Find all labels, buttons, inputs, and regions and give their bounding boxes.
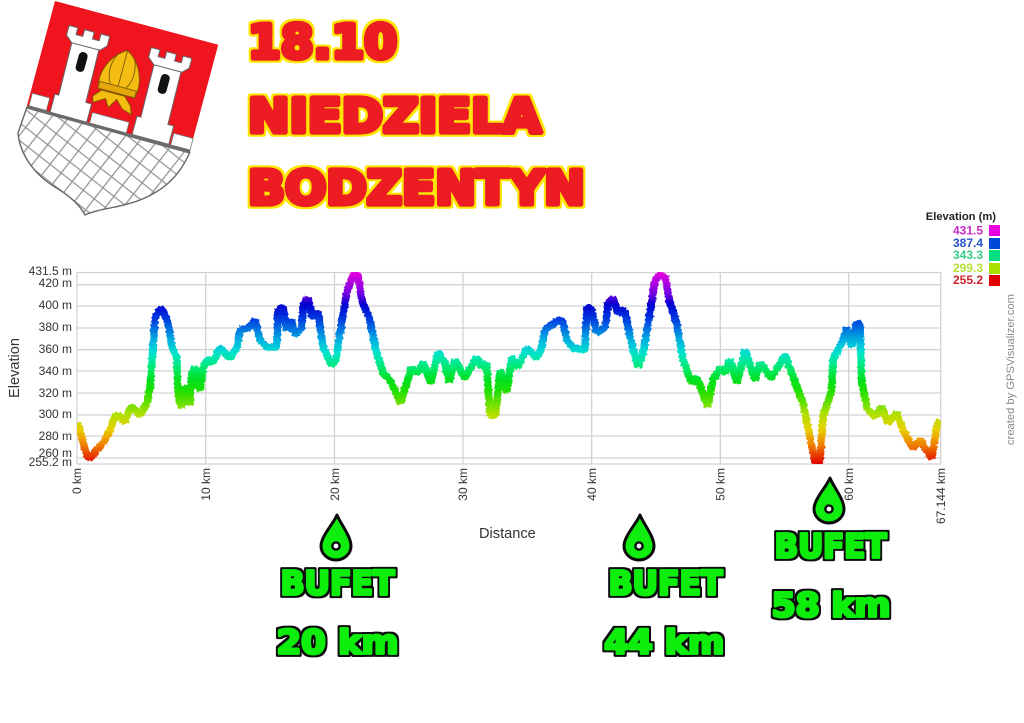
left tower (46, 25, 110, 122)
title line: town: BODZENTYN (248, 162, 585, 216)
x axis labels: 50 km (714, 468, 728, 501)
chart grid (77, 272, 941, 464)
label: 20 km: 20 km (277, 623, 398, 661)
credit text: created by GPSVisualizer.com (1005, 294, 1017, 445)
x axis labels: 67.144 km (934, 468, 948, 524)
x axis labels: 0 km (70, 468, 84, 494)
y axis labels: 360 m (39, 342, 72, 356)
coat of arms shield (18, 1, 218, 215)
legend row 255.2: 255.2 (953, 273, 983, 287)
icon: drop at 44 km (624, 515, 654, 560)
wall blocks (28, 93, 194, 151)
y axis title: Elevation (7, 338, 23, 398)
y axis labels: 431.5 m (29, 264, 72, 278)
elevation profile line (77, 275, 940, 462)
buffet marker 44 km (604, 515, 724, 661)
title (248, 16, 585, 216)
legend row 431.5: 431.5 (953, 224, 983, 238)
legend row 387.4: 387.4 (953, 236, 983, 250)
x axis labels: 60 km (842, 468, 856, 501)
legend title: Elevation (m) (926, 211, 996, 223)
title line: weekday: NIEDZIELA (248, 90, 541, 144)
y axis labels: 300 m (39, 407, 72, 421)
shield net lower part (18, 107, 190, 215)
label: BUFET: BUFET (775, 527, 887, 565)
y axis labels: 320 m (39, 386, 72, 400)
icon: drop at 20 km (321, 515, 351, 560)
legend row 299.3: 299.3 (953, 261, 983, 275)
label: 58 km: 58 km (772, 586, 890, 624)
x axis labels: 20 km (328, 468, 342, 501)
y axis labels (29, 264, 72, 469)
buffet marker 58 km (772, 478, 890, 624)
label: 44 km: 44 km (604, 623, 724, 661)
x axis title: Distance (479, 526, 536, 542)
y axis labels: 400 m (39, 298, 72, 312)
y axis labels: 340 m (39, 364, 72, 378)
y axis labels: 420 m (39, 276, 72, 290)
y axis labels: 280 m (39, 429, 72, 443)
x axis labels: 10 km (199, 468, 213, 501)
label: BUFET: BUFET (609, 564, 723, 602)
x axis labels: 30 km (456, 468, 470, 501)
y axis labels: 380 m (39, 320, 72, 334)
elevation chart (7, 264, 948, 542)
y axis labels: 260 m (39, 446, 72, 460)
buffet marker 20 km (277, 515, 398, 661)
icon: drop at 58 km (814, 478, 844, 523)
elevation legend (926, 211, 1000, 287)
x axis labels (70, 468, 948, 524)
shield red field with towers and mitre (27, 1, 218, 151)
y axis labels: 255.2 m (29, 455, 72, 469)
label: BUFET: BUFET (281, 564, 395, 602)
wall base line (27, 107, 190, 152)
legend row 343.3: 343.3 (953, 248, 983, 262)
x axis labels: 40 km (585, 468, 599, 501)
title line: date: 18.10 (248, 16, 397, 70)
golden mitre (91, 45, 147, 115)
right tower (128, 47, 192, 144)
